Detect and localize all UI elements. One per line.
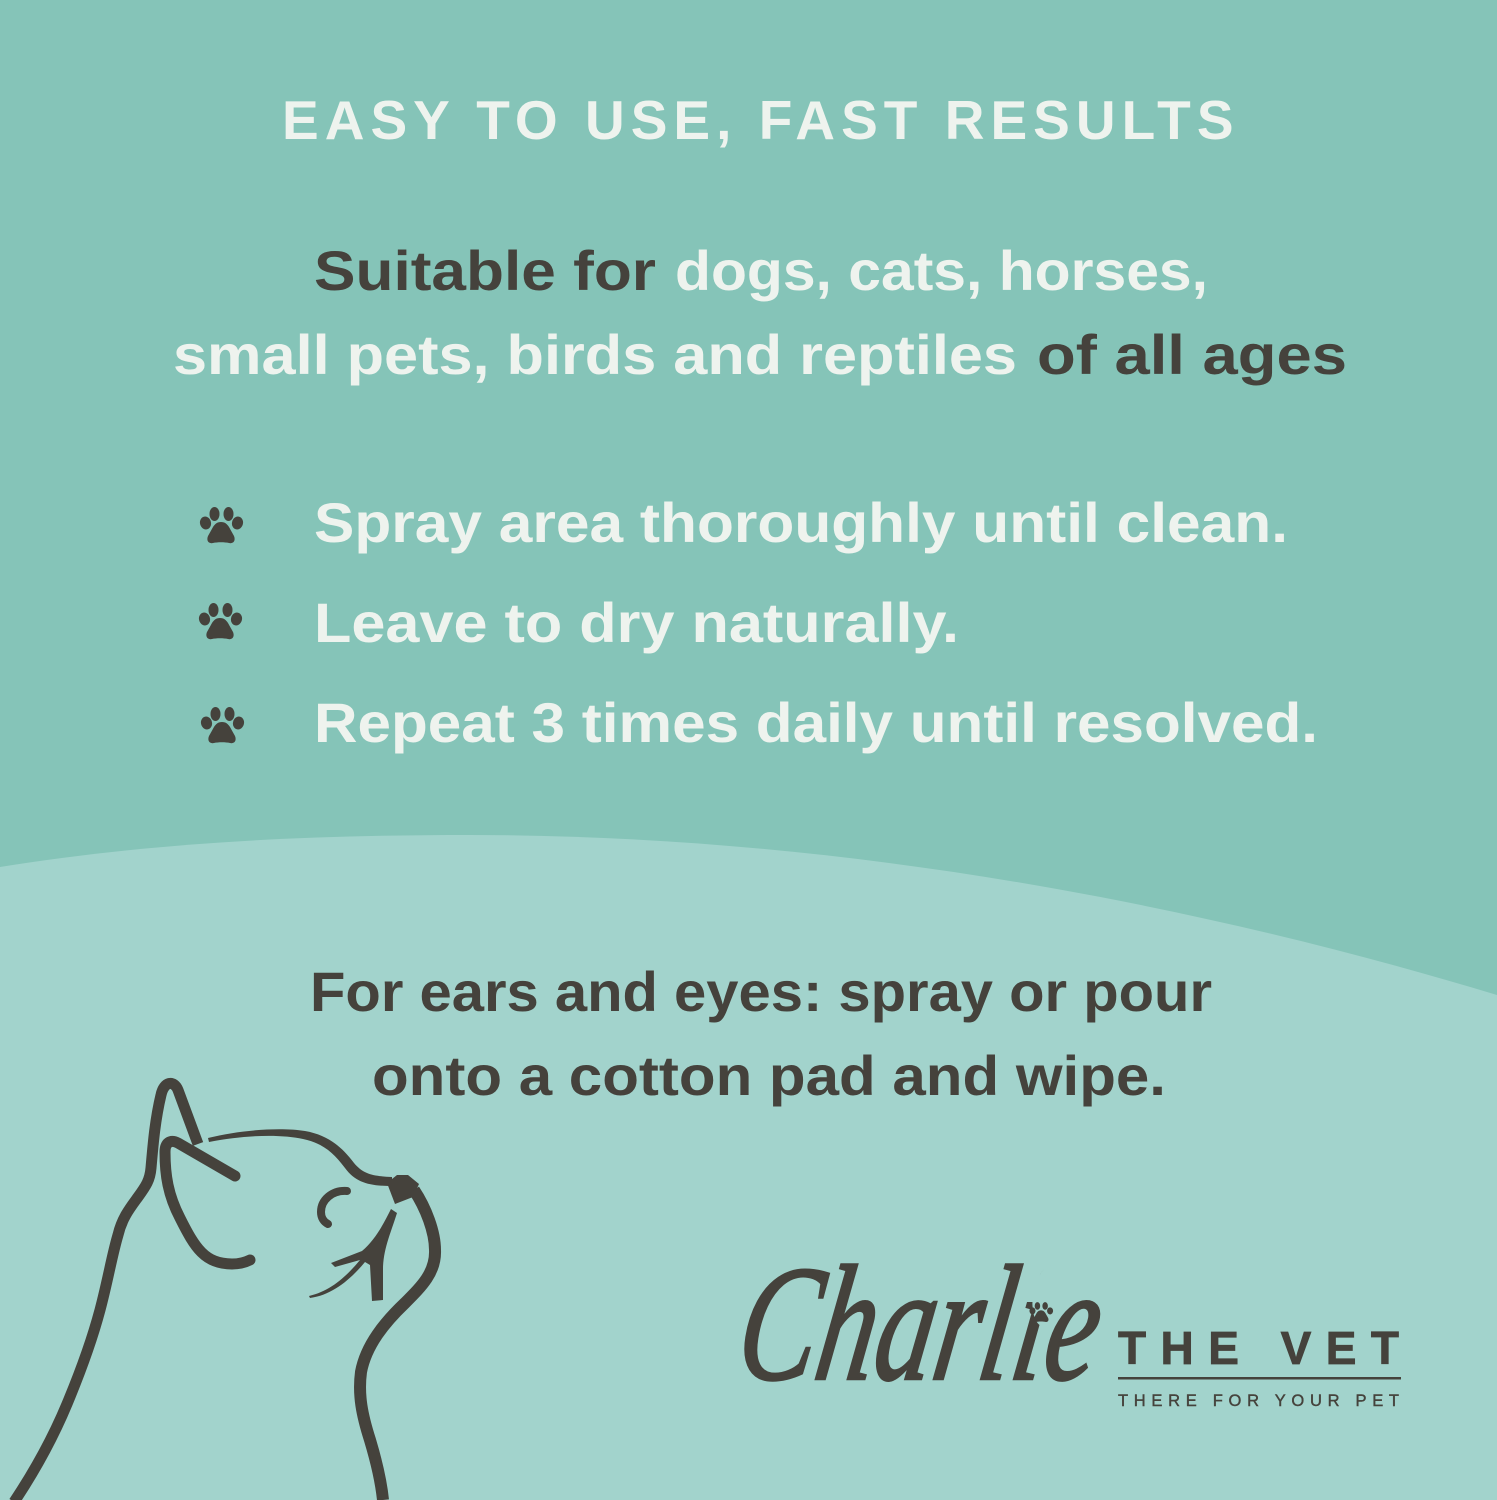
icon: paw bullet 1 (199, 507, 244, 543)
step 2 text: Leave to dry naturally. (314, 591, 959, 654)
text block: suitable for: of all ages (1037, 323, 1347, 386)
cat nose (387, 1175, 419, 1204)
bullet list (198, 491, 1318, 754)
cat face and chest (360, 1190, 435, 1500)
cat head top (208, 1129, 392, 1186)
cat inner ear (165, 1141, 250, 1264)
background: lower light curved panel (0, 835, 1497, 1500)
logo wordmark dot cover (1028, 1263, 1068, 1329)
illustration: cat line drawing (14, 1083, 435, 1500)
title: EASY TO USE, FAST RESULTS (282, 89, 1237, 151)
cat mouth (309, 1209, 397, 1301)
logo: Charlie the Vet (727, 1232, 1401, 1415)
icon: paw bullet 3 (200, 707, 245, 743)
step 3 text: Repeat 3 times daily until resolved. (314, 691, 1318, 754)
text block: suitable for: Suitable for (314, 239, 656, 302)
text block: suitable for: dogs, cats, horses, (675, 239, 1208, 302)
cat eye (321, 1191, 347, 1224)
icon: paw bullet 2 (198, 603, 243, 639)
text block: suitable for: small pets, birds and reptiles (173, 323, 1017, 386)
logo: THE VET: THE VET (1118, 1322, 1399, 1374)
icon: logo paw (1029, 1302, 1053, 1322)
text block: ears and eyes (310, 960, 1212, 1107)
text block: suitable for (173, 239, 1347, 386)
text block: ears and eyes: For ears and eyes: spray or pour (310, 960, 1212, 1023)
logo tagline: THERE FOR YOUR PET (1118, 1392, 1399, 1410)
step 1 text: Spray area thoroughly until clean. (314, 491, 1288, 554)
logo wordmark: Charlie (727, 1232, 1115, 1415)
text block: ears and eyes: onto a cotton pad and wipe. (372, 1044, 1166, 1107)
logo rule (1118, 1377, 1401, 1380)
cat back and outer ear (14, 1083, 198, 1500)
